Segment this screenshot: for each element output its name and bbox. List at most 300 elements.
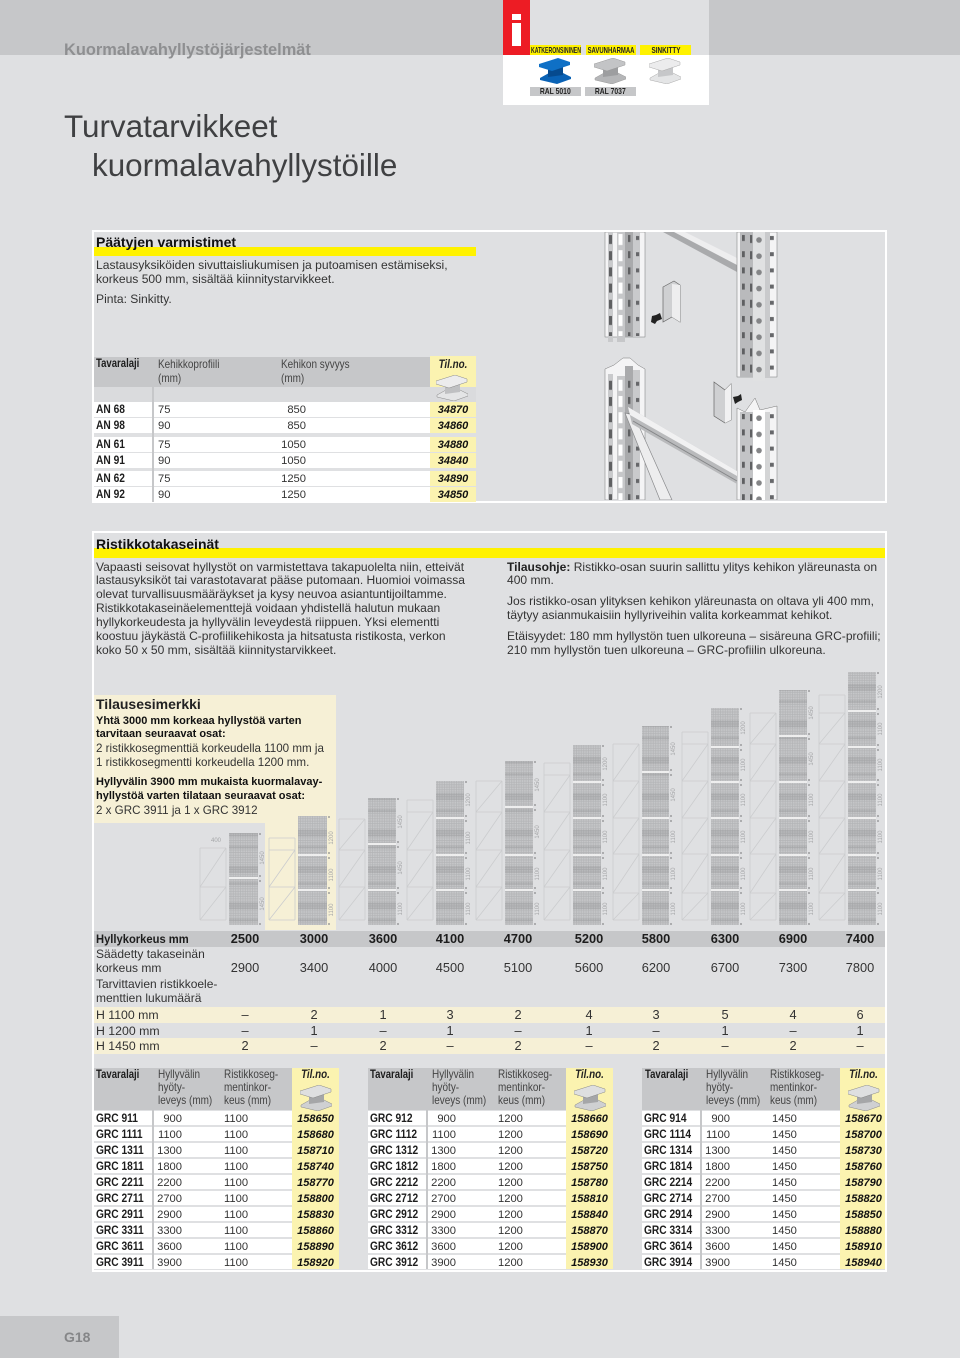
table: GRC 14 series: [642, 1067, 885, 1269]
row GRC 3614: GRC 3614: [644, 1238, 692, 1252]
column divider: [152, 387, 154, 502]
rack 2500: 400: [211, 838, 222, 844]
icon: blue beam: [539, 58, 571, 84]
text: guards description: korkeus 500 mm, sisältää kiinnitystarvikkeet.: [96, 272, 335, 286]
rack 4700: 1450: [535, 825, 541, 839]
rack 3600: 1450: [398, 861, 404, 875]
cream strip behind second rack: [265, 823, 336, 930]
row GRC 1112: [368, 1126, 613, 1141]
row GRC 1111: 158680: [297, 1128, 334, 1140]
row GRC 1114: [642, 1126, 887, 1141]
row GRC 1811: [94, 1158, 339, 1173]
row GRC 3314: 1450: [772, 1224, 797, 1236]
row GRC 3312: GRC 3312: [370, 1222, 418, 1236]
callout text: tarvitaan seuraavat osat:: [96, 728, 226, 740]
row AN 92: 34850: [438, 489, 468, 501]
row: H 1200: 1: [310, 1023, 318, 1038]
text: guards description: [96, 258, 448, 306]
header: bay width: hyöty-: [706, 1080, 733, 1094]
header background: [94, 1068, 292, 1110]
text: mesh right column: [507, 560, 881, 657]
rack 5800: 1100: [671, 867, 677, 880]
row: H 1200: –: [379, 1023, 387, 1038]
header: bay width: leveys (mm): [158, 1093, 212, 1107]
row: adjusted back panel height: 7800: [846, 960, 874, 975]
header: bay width: leveys (mm): [432, 1093, 486, 1107]
row GRC 2711: GRC 2711: [96, 1190, 144, 1204]
row GRC 3911: 158920: [297, 1256, 334, 1268]
rack 7400: 1100: [878, 830, 884, 843]
row GRC 3311: 158860: [297, 1224, 334, 1236]
column divider: [152, 1110, 154, 1269]
row GRC 2911: GRC 2911: [96, 1206, 144, 1220]
rack 5200: 1200: [603, 757, 609, 771]
row AN 98: AN 98: [96, 418, 125, 432]
row GRC 3911: [94, 1254, 339, 1269]
row AN 91: [94, 453, 476, 468]
row GRC 2914: 1450: [772, 1208, 797, 1220]
row: adjusted back panel height: 2900: [231, 960, 259, 975]
row GRC 1814: 1800: [705, 1160, 730, 1172]
main title: [64, 108, 397, 182]
row: H 1200: –: [789, 1023, 797, 1038]
rack 5800: 1450: [671, 742, 677, 756]
row GRC 1114: GRC 1114: [644, 1126, 691, 1140]
row GRC 912: 158660: [571, 1112, 608, 1124]
panel: back mesh panels: [92, 531, 887, 1272]
row GRC 3314: 158880: [845, 1224, 882, 1236]
rack 6300: 1100: [741, 793, 747, 806]
icon: grey beam: [594, 58, 626, 84]
label: katkeronsininen: KATKERONSININEN: [530, 45, 581, 55]
rack 4100: [407, 781, 472, 925]
main title: kuormalavahyllystöille: [92, 148, 397, 182]
upright top right: [737, 232, 777, 381]
row GRC 3914: 1450: [772, 1256, 797, 1268]
row: rack height: 6300: [711, 931, 739, 946]
row GRC 1812: 158750: [571, 1160, 608, 1172]
bracket lower: [714, 382, 731, 423]
row GRC 3912: [368, 1254, 613, 1269]
row GRC 2714: 2700: [705, 1192, 730, 1204]
callout text: hyllystöä varten tilataan seuraavat osat:: [96, 790, 305, 802]
row GRC 1311: GRC 1311: [96, 1142, 144, 1156]
label: sinkitty: [640, 45, 691, 55]
header: segment height: Ristikkoseg-: [498, 1067, 552, 1081]
row GRC 2714: [642, 1190, 887, 1205]
row GRC 1314: 1300: [705, 1144, 730, 1156]
header: bay width: Hyllyvälin: [432, 1067, 474, 1081]
row: number of mesh elements label: Tarvittavien ristikkoele-: [96, 977, 217, 991]
row GRC 3312: [368, 1222, 613, 1237]
row GRC 3312: 158870: [571, 1224, 608, 1236]
row: number of mesh elements label: [96, 977, 217, 1005]
horizontal beam lower: [628, 407, 737, 484]
rack 6900: 1100: [809, 793, 815, 806]
row GRC 2214: 158790: [845, 1176, 882, 1188]
row GRC 3314: GRC 3314: [644, 1222, 692, 1236]
header: segment height: mentinkor-: [224, 1080, 271, 1094]
callout text: [96, 714, 324, 817]
row AN 92: AN 92: [96, 487, 125, 501]
row GRC 3614: 3600: [705, 1240, 730, 1252]
callout: order example: [94, 695, 336, 823]
row GRC 3611: GRC 3611: [96, 1238, 144, 1252]
row AN 68: 75: [158, 404, 170, 416]
callout text: 2 x GRC 3911 ja 1 x GRC 3912: [96, 804, 258, 817]
header: bay width: hyöty-: [432, 1080, 459, 1094]
text: mesh right column: 400 mm.: [507, 573, 554, 587]
header: segment height: Ristikkoseg-: [224, 1067, 278, 1081]
row: H 1200: 1: [585, 1023, 593, 1038]
header: frame depth: (mm): [281, 371, 304, 385]
rack 6300: 1100: [741, 902, 747, 915]
row GRC 1111: 1100: [158, 1128, 182, 1140]
rack 4700: 1100: [535, 867, 541, 880]
rack 5200: 1100: [603, 902, 609, 915]
order number column: [292, 1068, 339, 1269]
rack 6900: 1450: [809, 706, 815, 720]
page number tab: [0, 1316, 119, 1358]
row AN 61: [94, 437, 476, 452]
row GRC 3314: [642, 1222, 887, 1237]
rack 5200: 1100: [603, 830, 609, 843]
row: adjusted back panel height: 4500: [436, 960, 464, 975]
row AN 91: 1050: [281, 455, 306, 467]
callout text: 1 ristikkosegmentti korkeudella 1200 mm.: [96, 756, 309, 769]
row GRC 1314: [642, 1142, 887, 1157]
row: rack height: [94, 931, 885, 947]
illustration: frame guards on uprights: [604, 232, 778, 500]
spacer band: [94, 387, 476, 402]
header: frame profile: [158, 357, 219, 385]
row GRC 1812: 1800: [431, 1160, 456, 1172]
row GRC 911: 1100: [224, 1112, 248, 1124]
row: adjusted back panel height: 5600: [575, 960, 603, 975]
row GRC 1811: GRC 1811: [96, 1158, 144, 1172]
text: mesh left column: Vapaasti seisovat hyllystöt on varmistettava takapuolelta niin, etteivät: [96, 560, 464, 574]
row GRC 1812: 1200: [498, 1160, 523, 1172]
row GRC 1112: GRC 1112: [370, 1126, 417, 1140]
row GRC 3312: 3300: [431, 1224, 456, 1236]
heading: mesh panels: Ristikkotakaseinät: [96, 536, 219, 552]
row: H 1450: –: [310, 1038, 318, 1053]
rack 4100: 1200: [466, 793, 472, 807]
row GRC 2712: 1200: [498, 1192, 523, 1204]
row: H 1200: 1: [446, 1023, 454, 1038]
row AN 62: AN 62: [96, 471, 125, 485]
row GRC 2211: [94, 1174, 339, 1189]
row GRC 3914: [642, 1254, 887, 1269]
running heading: Kuormalavahyllystöjärjestelmät: [64, 40, 311, 58]
row GRC 912: 900: [437, 1112, 456, 1124]
header: bay width: Hyllyvälin: [158, 1067, 200, 1081]
row: adjusted back panel height: [96, 947, 874, 975]
row GRC 914: [642, 1110, 887, 1125]
header: bay width: hyöty-: [158, 1080, 185, 1094]
header: frame depth: Kehikon syvyys: [281, 357, 350, 371]
callout heading: Tilausesimerkki: [96, 696, 201, 712]
text: mesh left column: olevat turvallisuusmääräykset ja kysy neuvoa asiantuntijoiltamme.: [96, 587, 447, 601]
row GRC 3911: 1100: [224, 1256, 248, 1268]
row: H 1100: 2: [310, 1007, 318, 1022]
text: mesh left column: [96, 560, 465, 657]
rack 5800: [613, 726, 677, 925]
row GRC 912: GRC 912: [370, 1110, 413, 1124]
row: rack height: 5800: [642, 931, 670, 946]
rack 7400: 1100: [878, 902, 884, 915]
table: required panels by rack height: [94, 931, 885, 1054]
row: adjusted back panel height: 5100: [504, 960, 532, 975]
row: adjusted back panel height: 4000: [369, 960, 397, 975]
row: rack height: 5200: [575, 931, 603, 946]
rack 7400: 1100: [878, 758, 884, 771]
row GRC 1812: [368, 1158, 613, 1173]
row GRC 3614: 1450: [772, 1240, 797, 1252]
row GRC 3912: 158930: [571, 1256, 608, 1268]
rack 6300: 1100: [741, 830, 747, 843]
row: H 1100: 4: [585, 1007, 593, 1022]
header: frame depth: [281, 357, 350, 385]
main title: Turvatarvikkeet: [64, 108, 277, 144]
row: H 1450: 2: [241, 1038, 249, 1053]
row GRC 2714: 1450: [772, 1192, 797, 1204]
row GRC 912: 1200: [498, 1112, 523, 1124]
row GRC 2712: [368, 1190, 613, 1205]
row GRC 1312: 1300: [431, 1144, 456, 1156]
header background: [368, 1068, 566, 1110]
rack 3000: [269, 816, 335, 925]
row GRC 2912: GRC 2912: [370, 1206, 418, 1220]
table: GRC 12 series: [368, 1067, 613, 1269]
row AN 68: 850: [287, 404, 306, 416]
row GRC 914: 900: [711, 1112, 730, 1124]
row GRC 3611: 3600: [157, 1240, 182, 1252]
row: rack height: 7400: [846, 931, 874, 946]
row GRC 2911: 158830: [297, 1208, 334, 1220]
row: rack height: 3000: [300, 931, 328, 946]
row GRC 1112: 1100: [432, 1128, 456, 1140]
row GRC 3612: 1200: [498, 1240, 523, 1252]
row GRC 3312: 1200: [498, 1224, 523, 1236]
header: product: Tavaralaji: [96, 1069, 139, 1081]
row AN 61: 34880: [438, 439, 468, 451]
header: frame profile: Kehikkoprofiili: [158, 357, 219, 371]
row: adjusted back panel height: 7300: [779, 960, 807, 975]
header: segment height: keus (mm): [770, 1093, 817, 1107]
row GRC 2714: GRC 2714: [644, 1190, 692, 1204]
row: H 1450: 2: [379, 1038, 387, 1053]
row GRC 1814: 158760: [845, 1160, 882, 1172]
row: adjusted back panel height: Säädetty takaseinän: [96, 947, 205, 961]
row GRC 2211: 158770: [297, 1176, 334, 1188]
row: H 1200: –: [514, 1023, 522, 1038]
row GRC 2711: 1100: [224, 1192, 248, 1204]
text: mesh left column: hyllykorkeudesta ja hyllyvälin leveydestä riippuen. Yksi elementti: [96, 615, 439, 629]
row GRC 3612: [368, 1238, 613, 1253]
row GRC 914: GRC 914: [644, 1110, 687, 1124]
row GRC 911: 158650: [297, 1112, 334, 1124]
row GRC 1311: 1100: [224, 1144, 248, 1156]
row GRC 1312: GRC 1312: [370, 1142, 418, 1156]
row AN 92: 90: [158, 489, 170, 501]
row GRC 1314: 1450: [772, 1144, 797, 1156]
row: H 1450: 2: [789, 1038, 797, 1053]
rack 6300: 1100: [741, 867, 747, 880]
label: RAL 7037: [585, 87, 636, 96]
row GRC 3912: 3900: [431, 1256, 456, 1268]
row: H 1450: 2: [652, 1038, 660, 1053]
label: RAL 5010: [530, 87, 581, 96]
header: segment height: [224, 1067, 278, 1107]
row: H 1450: –: [446, 1038, 454, 1053]
rack 7400: [819, 672, 884, 925]
row GRC 2911: [94, 1206, 339, 1221]
row AN 91: 34840: [438, 455, 468, 467]
row AN 98: 850: [287, 420, 306, 432]
label: RAL 5010: RAL 5010: [540, 86, 571, 96]
row GRC 1111: [94, 1126, 339, 1141]
row GRC 2912: 1200: [498, 1208, 523, 1220]
rack 3600: 1450: [398, 815, 404, 829]
row: H 1100: [94, 1007, 885, 1023]
key top background: [530, 0, 709, 55]
icon: beam: [574, 1085, 606, 1111]
row AN 61: AN 61: [96, 437, 125, 451]
rack 5200: 1100: [603, 793, 609, 806]
icon: red info tab: [503, 0, 530, 55]
panel: end-of-aisle guards: [92, 230, 887, 503]
rack 4700: 1100: [535, 902, 541, 915]
rack 6900: [750, 690, 815, 925]
icon: beam: [848, 1085, 880, 1111]
text: mesh left column: koostuu jäykästä C-profiilikehikosta ja hitsatusta ristikosta, verkon: [96, 629, 446, 643]
text: mesh left column: lastausyksiköt tai varastotavarat pääse putomaan. Huomioi voimassa: [96, 573, 465, 587]
rack 5800: 1100: [671, 902, 677, 915]
rack 3600: 1100: [398, 902, 404, 915]
rack 6300: [682, 708, 747, 925]
row AN 98: 34860: [438, 420, 468, 432]
icon: zinc beam: [649, 58, 681, 84]
row: adjusted back panel height: 6200: [642, 960, 670, 975]
icon: letter i dot: [512, 14, 521, 20]
row AN 91: AN 91: [96, 453, 125, 467]
row GRC 3911: 3900: [157, 1256, 182, 1268]
row GRC 3912: GRC 3912: [370, 1254, 418, 1268]
rack 4700: 1450: [535, 778, 541, 792]
rack 6900: 1450: [809, 752, 815, 766]
text: mesh left column: Ristikkotakaseinäelementtejä voidaan yhdistellä halutun mukaan: [96, 601, 440, 615]
row: rack height: 2500: [231, 931, 259, 946]
row GRC 1112: 1200: [498, 1128, 523, 1140]
row GRC 1314: GRC 1314: [644, 1142, 692, 1156]
row: H 1450: –: [585, 1038, 593, 1053]
row GRC 2911: 1100: [224, 1208, 248, 1220]
order number column: [840, 1068, 887, 1269]
text: mesh left column: koko 50 x 50 mm, sisältää kiinnitystarvikkeet.: [96, 643, 336, 657]
heading: guards: Päätyjen varmistimet: [96, 234, 236, 250]
row: H 1200: –: [652, 1023, 660, 1038]
row GRC 2914: [642, 1206, 887, 1221]
header: bay width: Hyllyvälin: [706, 1067, 748, 1081]
row: H 1200: 1: [721, 1023, 729, 1038]
row GRC 3914: 3900: [705, 1256, 730, 1268]
header: segment height: Ristikkoseg-: [770, 1067, 824, 1081]
row GRC 1811: 158740: [297, 1160, 334, 1172]
row GRC 2914: 2900: [705, 1208, 730, 1220]
row GRC 3611: 158890: [297, 1240, 334, 1252]
rack 4100: 1100: [466, 867, 472, 880]
row: H 1100: 3: [446, 1007, 454, 1022]
row: adjusted back panel height: 6700: [711, 960, 739, 975]
row GRC 1114: 1100: [706, 1128, 730, 1140]
row GRC 1814: [642, 1158, 887, 1173]
text: mesh right column: 210 mm hyllystön tuen ulkoreuna – GRC-profiilin ulkoreuna.: [507, 643, 826, 657]
row GRC 1114: 1450: [772, 1128, 797, 1140]
row GRC 2712: 2700: [431, 1192, 456, 1204]
rack 4100: 1100: [466, 831, 472, 844]
row: adjusted back panel height: 3400: [300, 960, 328, 975]
row: rack height: 4100: [436, 931, 464, 946]
row GRC 2912: [368, 1206, 613, 1221]
row GRC 3911: GRC 3911: [96, 1254, 144, 1268]
row GRC 1111: 1100: [224, 1128, 248, 1140]
callout text: Yhtä 3000 mm korkeaa hyllystöä varten: [96, 714, 301, 726]
rack 6900: 1100: [809, 902, 815, 915]
row GRC 2711: 158800: [297, 1192, 334, 1204]
header: bay width: [706, 1067, 760, 1107]
row GRC 2212: GRC 2212: [370, 1174, 418, 1188]
row GRC 2712: 158810: [571, 1192, 608, 1204]
rack 7400: 1100: [878, 867, 884, 880]
row GRC 2214: GRC 2214: [644, 1174, 692, 1188]
row GRC 1312: 158720: [571, 1144, 608, 1156]
rack 7400: 1200: [878, 685, 884, 699]
text: mesh right column: täytyy asianmukaisiin hyllyriveihin valita korkeammat kehikot.: [507, 608, 832, 622]
row GRC 1312: [368, 1142, 613, 1157]
row: rack height: 4700: [504, 931, 532, 946]
chart: rack elevation diagrams: [200, 672, 884, 925]
header: bay width: leveys (mm): [706, 1093, 760, 1107]
row AN 61: 75: [158, 439, 170, 451]
row: H 1450: 2: [514, 1038, 522, 1053]
rack 2500: [200, 833, 266, 925]
header: product: Tavaralaji: [370, 1069, 413, 1081]
row GRC 3311: 3300: [157, 1224, 182, 1236]
text: guards description: Lastausyksiköiden sivuttaisliukumisen ja putoamisen estämiseksi,: [96, 258, 448, 272]
row GRC 2214: 1450: [772, 1176, 797, 1188]
callout text: 2 ristikkosegmenttiä korkeudella 1100 mm ja: [96, 742, 324, 755]
header: order no: Til.no.: [301, 1067, 330, 1081]
header cell: order number: [430, 356, 476, 387]
row AN 98: [94, 418, 476, 432]
row GRC 1814: 1450: [772, 1160, 797, 1172]
row GRC 2211: 1100: [224, 1176, 248, 1188]
upright bottom right: [737, 398, 777, 500]
header: product: Tavaralaji: [645, 1069, 688, 1081]
row GRC 3311: GRC 3311: [96, 1222, 144, 1236]
row: H 1200: [96, 1023, 864, 1038]
row GRC 1812: GRC 1812: [370, 1158, 418, 1172]
row: H 1100: –: [241, 1007, 249, 1022]
row AN 62: [94, 471, 476, 486]
label: savunharmaa: SAVUNHARMAA: [588, 45, 634, 55]
rack 6300: 1100: [741, 758, 747, 771]
row GRC 1814: GRC 1814: [644, 1158, 692, 1172]
rack 2500: 1450: [260, 897, 266, 911]
row AN 68: AN 68: [96, 402, 125, 416]
row GRC 2912: 2900: [431, 1208, 456, 1220]
